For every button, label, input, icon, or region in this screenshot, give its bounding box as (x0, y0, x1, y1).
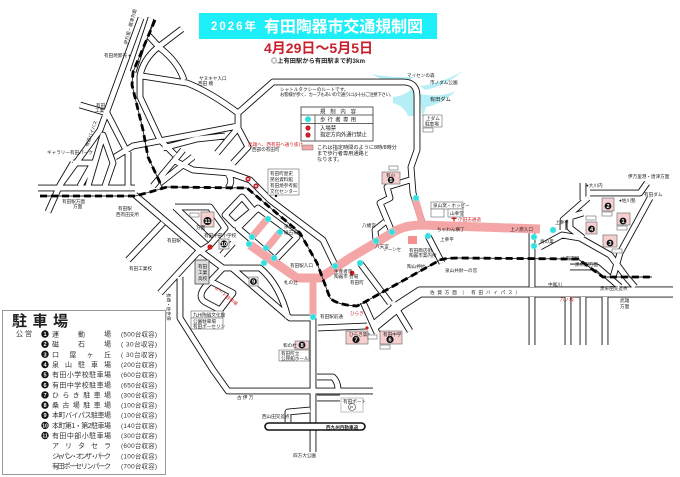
parking rows: 磁石場 (52, 340, 111, 349)
map place labels: 泉山 (284, 223, 294, 230)
map place labels: 工業 (95, 107, 105, 114)
parking 4 (586, 216, 597, 234)
parking rows: 6 (43, 383, 47, 389)
parking rows: 8 (43, 403, 47, 409)
map place labels: 泉山窯・ホッピー (433, 202, 470, 209)
dam labels (407, 72, 458, 132)
map place labels: 有田 (198, 263, 208, 270)
parking rows: ( 30台収容) (121, 350, 157, 359)
map place labels: 四方大公園 (293, 452, 316, 459)
map place labels: 有田駅入口 (290, 262, 313, 269)
map place labels: ギャラリー有田パーク (47, 149, 93, 156)
parking list heading: 駐車場 (12, 312, 68, 330)
map place labels: ●大川内 (586, 182, 603, 189)
map place labels: 有田工業校 (129, 265, 152, 272)
map place labels: 有田駅方面 (62, 198, 85, 205)
parking rows: 7 (43, 393, 47, 399)
parking 4: 4 (590, 227, 594, 233)
map place labels: 八天宮 (375, 243, 389, 250)
parking 9 (249, 277, 258, 286)
parking 5: 5 (389, 178, 393, 184)
parking rows: 桑古場駐車場 (52, 401, 111, 410)
map place labels: 武雄へ、西有田へ通り抜け (248, 141, 304, 148)
parking rows: 4 (43, 362, 47, 368)
map place labels: 有田 (96, 102, 106, 109)
parking rows: 本町第1・第2駐車場 (52, 421, 111, 430)
parking rows: (140台収容) (121, 421, 157, 430)
map place labels: 方面 (196, 224, 206, 231)
map place labels: 有田駅 (118, 205, 132, 212)
railway line (40, 20, 652, 306)
map place labels: 公園駐車場 (193, 318, 216, 325)
parking 6: 6 (388, 338, 392, 344)
parking 7 (346, 331, 377, 344)
parking rows: (700台収容) (121, 462, 157, 470)
parking 1 (617, 213, 630, 230)
parking 11 (190, 212, 214, 227)
panel: parking list (2, 310, 166, 474)
map place labels: ●佐川塾 (619, 197, 636, 204)
map place labels: 長崎・佐世保 (165, 293, 172, 321)
legend table: 規制内容 (320, 108, 357, 116)
parking rows: 本町バイパス駐車場 (52, 411, 111, 420)
map place labels: 上有田駅 (561, 255, 580, 262)
map place labels: 有田ダム (644, 191, 663, 198)
distance note: ◎上有田駅から有田駅まで約3km (271, 57, 365, 65)
map place labels: 有田町 (350, 279, 364, 286)
legend: pink route (302, 143, 398, 163)
parking rows: 有田中学校駐車場 (52, 380, 111, 389)
parking 6: 有田中学 (383, 331, 402, 338)
map place labels: 有田ポート (343, 398, 366, 405)
parking 9: 9 (252, 280, 255, 286)
shuttle route note: シャトルタクシーのルートです。 (280, 86, 348, 93)
map place labels: 西有田支所 (116, 211, 139, 218)
red restriction markers (207, 176, 457, 330)
map place labels: 有田町立 (281, 350, 300, 357)
map place labels: 有田駅 (167, 237, 181, 244)
parking 8: 8 (300, 343, 304, 349)
parking rows: 5 (43, 373, 47, 379)
legend table (301, 107, 373, 141)
parking 3: 3 (608, 241, 612, 247)
map place labels: 西部の有田町 (252, 146, 280, 153)
main venue block (408, 236, 417, 244)
legend: pink route: これは指定時間のように8時/8時分 (317, 143, 398, 151)
expressway: 西九州自動車道: 西九州自動車道 (326, 424, 359, 431)
parking rows: 1 (43, 332, 47, 338)
parking 8: 和の杜 (283, 342, 297, 349)
map place labels: 山幸堂 (450, 210, 464, 217)
parking 2 (602, 198, 614, 216)
map place labels: 黒牟田方面 (575, 261, 598, 268)
map place labels: 公民館ホール (281, 355, 309, 362)
dam labels: 市ノダム公園 (430, 79, 458, 86)
parking rows: 運動場 (52, 330, 111, 338)
map place labels: 上幸平 (440, 236, 454, 243)
map place labels: 有田焼卸売 ● (104, 52, 131, 59)
map place labels: 佐賀方面（ 有田バイパス） (430, 289, 520, 296)
map place labels: ひらき (350, 310, 364, 317)
map place labels: 黒牟田交差点 (600, 285, 628, 292)
map place labels: サヌキヤ入口 (199, 76, 227, 82)
parking rows: (650台収容) (121, 380, 157, 389)
map place labels: 民俗資料館 (270, 176, 293, 183)
map place labels: ゾーンセ (383, 247, 402, 252)
dam labels: 有田ダム (430, 95, 451, 103)
parking rows: 有田ポーセリンパーク (52, 462, 111, 470)
map place labels: 磁石場 (284, 229, 298, 236)
parking rows: 2 (43, 342, 47, 348)
map place labels: ポート駐車場 (213, 285, 239, 308)
map place labels: 小田志通過 (458, 216, 481, 223)
map place labels: 方面 (73, 203, 83, 210)
parking rows: 口屋ヶ丘 (52, 350, 111, 359)
parking rows: ジャパン・オンザ・パーク (52, 452, 111, 460)
parking 7: ひらき第2 (349, 331, 370, 338)
map place labels: 泉山弁財一の宮 (445, 267, 478, 274)
parking 8 (283, 341, 309, 349)
parking rows: 11 (42, 434, 48, 440)
map place labels: 西山田交差点 (262, 413, 290, 420)
parking rows: アリタセラ (52, 441, 111, 450)
dam labels: 駐車場 (425, 120, 439, 128)
date heading: 4月29日～5月5日 (264, 40, 373, 56)
shuttle route note (280, 86, 394, 98)
map place labels: 中尾川 (548, 281, 562, 288)
public label: 公営 (16, 329, 32, 338)
parking markers on map (190, 166, 630, 349)
map place labels: 生産者市 (334, 268, 353, 275)
parking rows: (100台収容) (121, 411, 157, 420)
legend table: 歩行者専用 (320, 116, 356, 124)
parking rows: 9 (43, 413, 47, 419)
map place labels: 有田ポーセリン (193, 323, 226, 330)
shuttle route note: お客様が歩く、カーブもあいので通りには十分ご注意下さい。 (280, 91, 394, 98)
parking rows (41, 330, 157, 470)
parking rows: (100台収容) (121, 451, 157, 460)
dam labels: マイセンの森 (407, 72, 435, 79)
legend table: 指定方向外通行禁止 (320, 130, 368, 138)
parking 5: 有小 (386, 172, 396, 179)
map place labels: 工業 (198, 269, 208, 276)
parking rows: 3 (43, 352, 47, 358)
map place labels: 上幸平 (555, 219, 569, 226)
parking 3 (603, 235, 622, 253)
parking rows: (300台収容) (121, 431, 157, 440)
parking 7: 7 (354, 338, 358, 344)
legend table: 入場禁 (320, 124, 337, 132)
expressway: 西九州自動車道 (265, 423, 365, 431)
parking 6 (380, 331, 402, 349)
parking rows: (600台収容) (121, 441, 157, 450)
parking 1: 1 (621, 219, 625, 225)
parking rows: (500台収容) (121, 330, 157, 338)
parking rows: 10 (42, 423, 48, 429)
map place labels: 武雄 (620, 297, 630, 304)
map place labels: 有田焼参考館 (270, 182, 298, 189)
parking rows: (300台収容) (121, 390, 157, 399)
parking rows: (200台収容) (121, 360, 157, 369)
map place labels: 有田町歴史 (270, 170, 293, 177)
map place labels: 西田 橋 (198, 80, 213, 87)
title banner: 2026年 (211, 19, 256, 33)
legend: pink route: まで歩行者専用通路と (317, 149, 369, 157)
cyan barrier markers (246, 195, 556, 320)
parking rows: (600台収容) (121, 370, 157, 379)
red restriction markers: ✚ (451, 216, 457, 223)
parking rows: ひらき駐車場 (52, 390, 111, 399)
map place labels: 陶器市案内所 (409, 252, 437, 259)
map place labels: ちゃわん横丁 (437, 226, 465, 233)
map place labels: P (350, 405, 353, 410)
title banner (199, 13, 437, 39)
map place labels: 八ノ坂 (560, 296, 574, 303)
parking 5 (382, 166, 400, 184)
dam water (371, 71, 463, 118)
parking rows: ( 30台収容) (121, 340, 157, 349)
map place labels: 八幡宮 (362, 222, 376, 229)
parking 2: 2 (606, 204, 610, 210)
map place labels: 伊万里・唐津方面 (122, 8, 139, 46)
dam labels: 上ダム (426, 115, 440, 122)
map place labels: 有田中部小学校 (204, 232, 237, 239)
parking rows: 有田中部小駐車場 (52, 431, 111, 440)
map place labels: 鳥の巣 (540, 238, 554, 245)
parking 11: 11 (205, 219, 210, 225)
parking rows: 有田小学校駐車場 (52, 370, 111, 379)
map place labels: 高校 (198, 275, 208, 282)
legend: pink route: なります。 (317, 156, 342, 163)
map place labels: 有田町役場 (276, 173, 299, 180)
map place labels: 有田商店街 (409, 247, 432, 254)
map place labels: 有田バイパス (83, 119, 99, 148)
map place labels: 方面 (620, 303, 630, 310)
parking 10: 10 (221, 242, 227, 248)
map place labels: 陶器市 会場 (334, 273, 359, 280)
parking rows: (100台収容) (121, 401, 157, 410)
map place labels: 札の辻 (284, 279, 298, 286)
parking rows: 泉山駐車場 (52, 360, 111, 369)
map place labels: 上ノ原入口 (510, 226, 533, 233)
title banner: 有田陶器市交通規制図 (264, 17, 423, 36)
map place labels: 文化センター (270, 188, 298, 195)
map place labels: 陶山神社 (407, 263, 426, 270)
map place labels: 有田駅前通 (320, 313, 343, 320)
traffic restricted pedestrian route (250, 198, 540, 316)
map place labels: 九州陶磁文化館 (193, 312, 226, 318)
map place labels: 古 伊 万 (237, 394, 254, 401)
parking 10 (219, 239, 229, 249)
map place labels: 伊万里港・唐津方面 (628, 173, 670, 180)
